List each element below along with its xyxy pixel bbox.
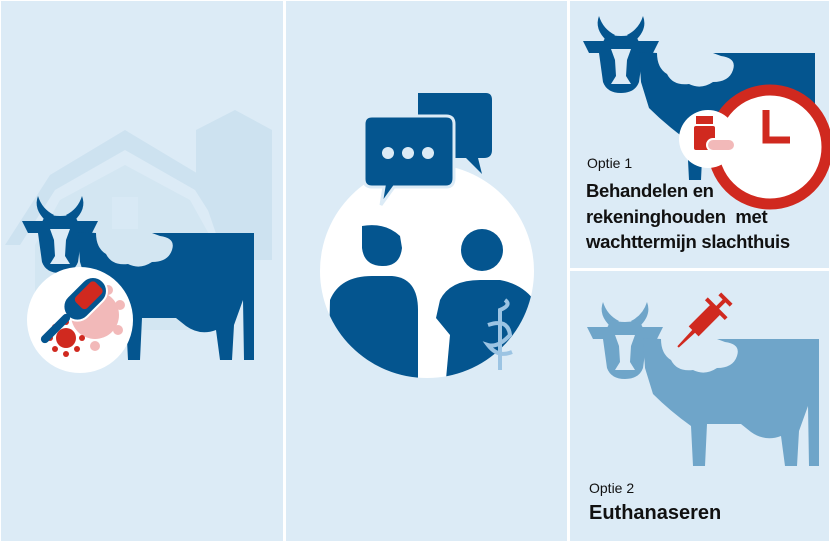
icon: barn [5, 110, 272, 330]
panel: middle background [286, 1, 567, 541]
icon: medicine [679, 110, 737, 168]
icon: thermometer and virus [27, 267, 133, 373]
icon: clock [713, 90, 827, 204]
panel: left background [1, 1, 283, 541]
panel: option 2 background [570, 271, 829, 541]
text: option 1 label: Optie 1 [587, 155, 632, 171]
text: option 1 heading: wachttermijn slachthuis [586, 231, 790, 252]
text: option 2 heading: Euthanaseren [589, 502, 721, 524]
icon: cow option 1 [583, 16, 815, 180]
text: option 1 heading: rekeninghouden met [586, 206, 767, 226]
panel: option 1 background [570, 1, 829, 268]
text: option 1 heading [586, 180, 790, 252]
icon: conversation circle [320, 93, 540, 390]
text: option 2 label: Optie 2 [589, 480, 634, 496]
icon: cow option 2 [587, 302, 819, 466]
icon: sick cow [22, 196, 254, 360]
text: option 1 heading: Behandelen en [586, 180, 714, 201]
icon: syringe [668, 288, 737, 357]
